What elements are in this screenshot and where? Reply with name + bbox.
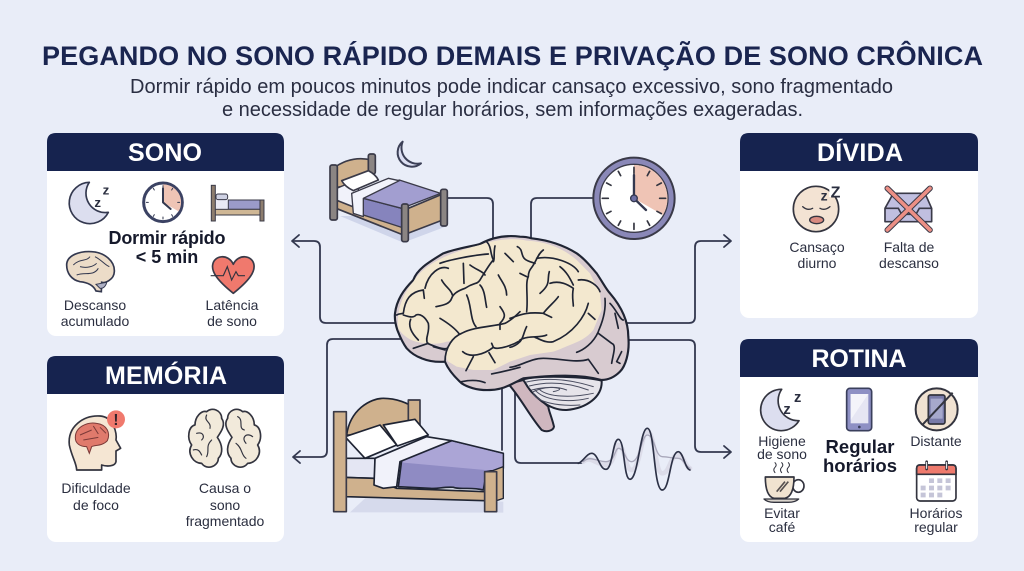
icon: sleepy face [793,184,843,232]
memória text: dificuldade de foco: Dificuldade [61,480,131,496]
sono text: latência de sono: de sono [207,313,257,329]
memória header: MEMÓRIA [105,360,227,390]
panel: sono [47,133,284,336]
rotina text: regular horários: horários [823,455,897,476]
rotina text: regular horários [823,436,897,476]
rotina text: horários regular: Horários [910,505,962,521]
illustration: central brain [395,236,629,431]
sono text: descanso acumulado [61,297,129,329]
icon: coffee cup [764,463,804,502]
memória text: dificuldade de foco: de foco [73,497,119,513]
rotina header [740,339,978,377]
icon: calendar [917,462,956,501]
icon: sleepy face: Z [831,184,841,201]
dívida text: falta de descanso: descanso [879,255,939,271]
panel: rotina [740,339,978,542]
rotina text: horários regular: regular [914,519,958,535]
subtitle: e necessidade de regular horários, sem informações exageradas. [222,99,803,121]
dívida text: cansaço diurno: diurno [798,255,837,271]
icon: moon [761,389,801,431]
dívida header [740,133,978,171]
brain folds right [510,247,623,373]
connector lines and arrows [292,198,731,463]
rotina text: higiene de sono: Higiene [758,433,806,449]
icon: head with brain and alert: ! [113,412,119,429]
rotina text: evitar café [764,505,800,535]
dívida text: falta de descanso [879,239,939,271]
sono header: SONO [128,139,202,167]
icon: heart with pulse [211,257,254,293]
illustration: top bed [330,154,447,243]
rotina text: horários regular [910,505,962,535]
memória text: causa o sono fragmentado: sono [210,497,240,513]
illustration: sleep wave [578,428,690,490]
sono text: latência de sono [206,297,259,329]
illustration: bottom bed [334,398,503,513]
rotina text: evitar café: Evitar [764,505,800,521]
sono header [47,133,284,171]
sono text: latência de sono: Latência [206,297,259,313]
icon: moon [69,182,110,224]
rotina text: evitar café: café [769,519,795,535]
sono text: dormir rápido: < 5 min [136,247,198,267]
icon: phone [847,388,872,431]
icon: moon: z [103,182,110,197]
memória text: causa o sono fragmentado [186,480,265,529]
sono text: dormir rápido [108,228,226,267]
illustration: clock [593,158,675,239]
dívida header: DÍVIDA [817,138,903,167]
icon: sleepy face: z [821,187,828,203]
icon: small brain [67,252,114,292]
icon: bed [211,185,264,221]
icon: moon: z [94,195,101,210]
icon: fragmented brain [189,409,261,467]
icon: moon: z [783,402,791,418]
rotina header: ROTINA [812,345,906,373]
sono text: descanso acumulado: Descanso [64,297,126,313]
subtitle: Dormir rápido em poucos minutos pode indicar cansaço excessivo, sono fragmentado [130,76,893,98]
title: PEGANDO NO SONO RÁPIDO DEMAIS E PRIVAÇÃO DE SONO CRÔNICA [42,40,983,71]
rotina text: higiene de sono [757,433,807,462]
brain folds left [397,242,520,383]
icon: crossed tray [885,188,932,230]
icon: crossed phone [916,388,958,430]
dívida text: cansaço diurno [789,239,845,271]
sono text: dormir rápido: Dormir rápido [108,228,226,248]
subtitle [130,76,893,121]
brain body [395,236,629,390]
memória header [47,356,284,394]
brainstem [508,380,554,431]
sono text: descanso acumulado: acumulado [61,313,129,329]
dívida text: cansaço diurno: Cansaço [789,239,845,255]
brain highlight [398,239,602,370]
cerebellum [523,377,602,410]
rotina text: higiene de sono: de sono [757,446,807,462]
panel: dívida [740,133,978,318]
memória text: causa o sono fragmentado: Causa o [199,480,251,496]
icon: moon: z [794,390,801,406]
panel: memória [47,356,284,542]
icon: head with brain and alert [69,410,125,470]
memória text: causa o sono fragmentado: fragmentado [186,513,265,529]
icon: crescent moon [398,142,421,167]
icons of sono panel [67,182,264,293]
rotina text: distante: Distante [910,433,962,449]
rotina text: regular horários: Regular [826,436,894,457]
icon: clock [144,183,182,222]
memória text: dificuldade de foco [61,480,131,513]
dívida text: falta de descanso: Falta de [884,239,935,255]
